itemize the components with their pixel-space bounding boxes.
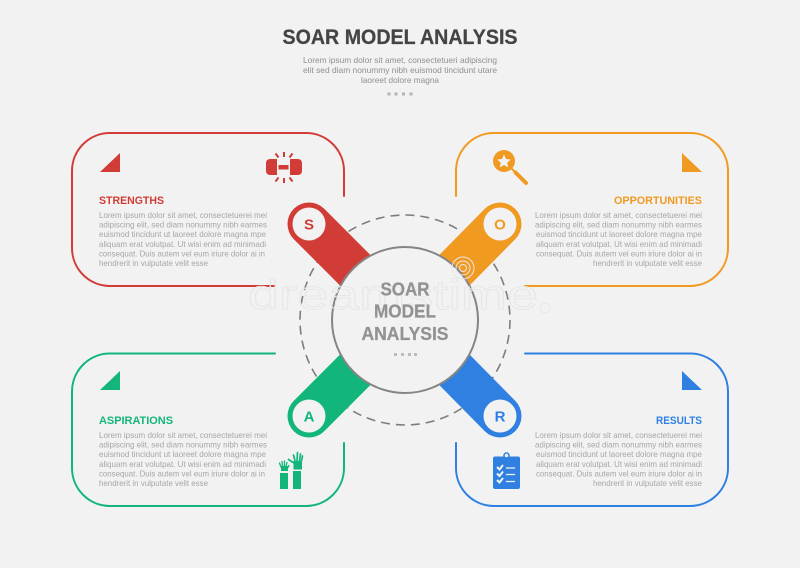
body text: strengths: Lorem ipsum dolor sit amet, consectetuerei mei bbox=[99, 210, 267, 220]
pill: S bbox=[292, 208, 380, 295]
panel: strengths bbox=[72, 133, 344, 286]
icon: dumbbell bbox=[266, 152, 302, 183]
body text: opportunities: aliquam erat volutpat. Ut wisi enim ad minimadi bbox=[536, 239, 702, 249]
body text: aspirations: adipiscing elit, sed diam nonummy nibh earmes bbox=[99, 440, 267, 450]
body text: strengths: consequat. Duis autem vel eum iriure dolor ai in bbox=[99, 248, 265, 258]
body text: results: aliquam erat volutpat. Ut wisi enim ad minimadi bbox=[536, 459, 702, 469]
watermark bbox=[248, 257, 550, 318]
body text: opportunities: adipiscing elit, sed diam nonummy nibh earmes bbox=[535, 220, 702, 230]
pill: A bbox=[292, 345, 380, 432]
body text: aspirations: consequat. Duis autem vel eum iriure dolor ai in bbox=[99, 468, 265, 478]
subtitle text: laoreet dolore magna bbox=[361, 75, 439, 85]
body text: results: Lorem ipsum dolor sit amet, consectetuerei mei bbox=[535, 430, 702, 440]
pill: S: S bbox=[304, 216, 314, 234]
title dots bbox=[388, 92, 412, 96]
corner triangle: results bbox=[682, 371, 702, 390]
corner triangle: opportunities bbox=[682, 153, 702, 172]
centre label: SOAR bbox=[380, 280, 430, 300]
body text: opportunities: hendrerit in vulputate velit esse bbox=[593, 258, 702, 268]
pill: A: A bbox=[304, 408, 315, 426]
centre label bbox=[362, 280, 448, 344]
panel outline: opportunities bbox=[456, 133, 728, 286]
pill: O: O bbox=[494, 216, 506, 234]
centre label: MODEL bbox=[374, 302, 436, 322]
subtitle text: Lorem ipsum dolor sit amet, consectetueri adipiscing bbox=[303, 55, 497, 65]
centre circle bbox=[332, 247, 478, 393]
panel outline: strengths bbox=[72, 133, 344, 286]
icon: clipboard bbox=[493, 453, 520, 489]
icon: raised hands bbox=[280, 452, 302, 489]
body text: strengths: aliquam erat volutpat. Ut wisi enim ad minimadi bbox=[99, 239, 266, 249]
subtitle text bbox=[303, 55, 497, 85]
watermark: dreamstime bbox=[248, 271, 538, 318]
panel: opportunities bbox=[456, 133, 728, 286]
body text: aspirations bbox=[99, 430, 267, 488]
body text: results: hendrerit in vulputate velit esse bbox=[593, 478, 702, 488]
dashed ring bbox=[300, 215, 510, 425]
body text: results: consequat. Duis autem vel eum iriure dolor ai in bbox=[536, 468, 702, 478]
title: SOAR MODEL ANALYSIS bbox=[282, 26, 518, 49]
body text: results: euismod tincidunt ut laoreet dolore magna mpe bbox=[536, 449, 702, 459]
panel outline: aspirations bbox=[72, 354, 344, 506]
central diagram bbox=[248, 208, 550, 432]
centre dots bbox=[394, 353, 417, 356]
panel: aspirations bbox=[72, 354, 344, 506]
pill: R: R bbox=[495, 408, 506, 426]
icon: magnifier with star bbox=[493, 150, 526, 183]
body text: opportunities bbox=[535, 210, 702, 268]
panel outline: results bbox=[456, 354, 728, 506]
heading: aspirations: ASPIRATIONS bbox=[99, 415, 173, 427]
pill: R bbox=[430, 345, 516, 432]
body text: aspirations: hendrerit in vulputate velit esse bbox=[99, 478, 208, 488]
panel: results bbox=[456, 354, 728, 506]
corner triangle: strengths bbox=[100, 153, 120, 172]
body text: aspirations: euismod tincidunt ut laoreet dolore magna mpe bbox=[99, 449, 266, 459]
body text: opportunities: euismod tincidunt ut laoreet dolore magna mpe bbox=[536, 229, 702, 239]
body text: aspirations: Lorem ipsum dolor sit amet, consectetuerei mei bbox=[99, 430, 267, 440]
corner triangle: aspirations bbox=[100, 371, 120, 390]
centre label: ANALYSIS bbox=[362, 324, 448, 344]
body text: opportunities: Lorem ipsum dolor sit amet, consectetuerei mei bbox=[535, 210, 702, 220]
heading: results: RESULTS bbox=[656, 415, 702, 427]
body text: strengths: adipiscing elit, sed diam nonummy nibh earmes bbox=[99, 220, 267, 230]
body text: results bbox=[535, 430, 702, 488]
body text: strengths: hendrerit in vulputate velit esse bbox=[99, 258, 208, 268]
body text: opportunities: consequat. Duis autem vel eum iriure dolor ai in bbox=[536, 248, 702, 258]
pill: O bbox=[430, 208, 516, 295]
body text: strengths: euismod tincidunt ut laoreet dolore magna mpe bbox=[99, 229, 266, 239]
heading: strengths: STRENGTHS bbox=[99, 195, 164, 207]
subtitle text: elit sed diam nonummy nibh euismod tincidunt utare bbox=[303, 65, 497, 75]
body text: strengths bbox=[99, 210, 267, 268]
body text: aspirations: aliquam erat volutpat. Ut wisi enim ad minimadi bbox=[99, 459, 266, 469]
body text: results: adipiscing elit, sed diam nonummy nibh earmes bbox=[535, 440, 702, 450]
heading: opportunities: OPPORTUNITIES bbox=[614, 195, 702, 207]
